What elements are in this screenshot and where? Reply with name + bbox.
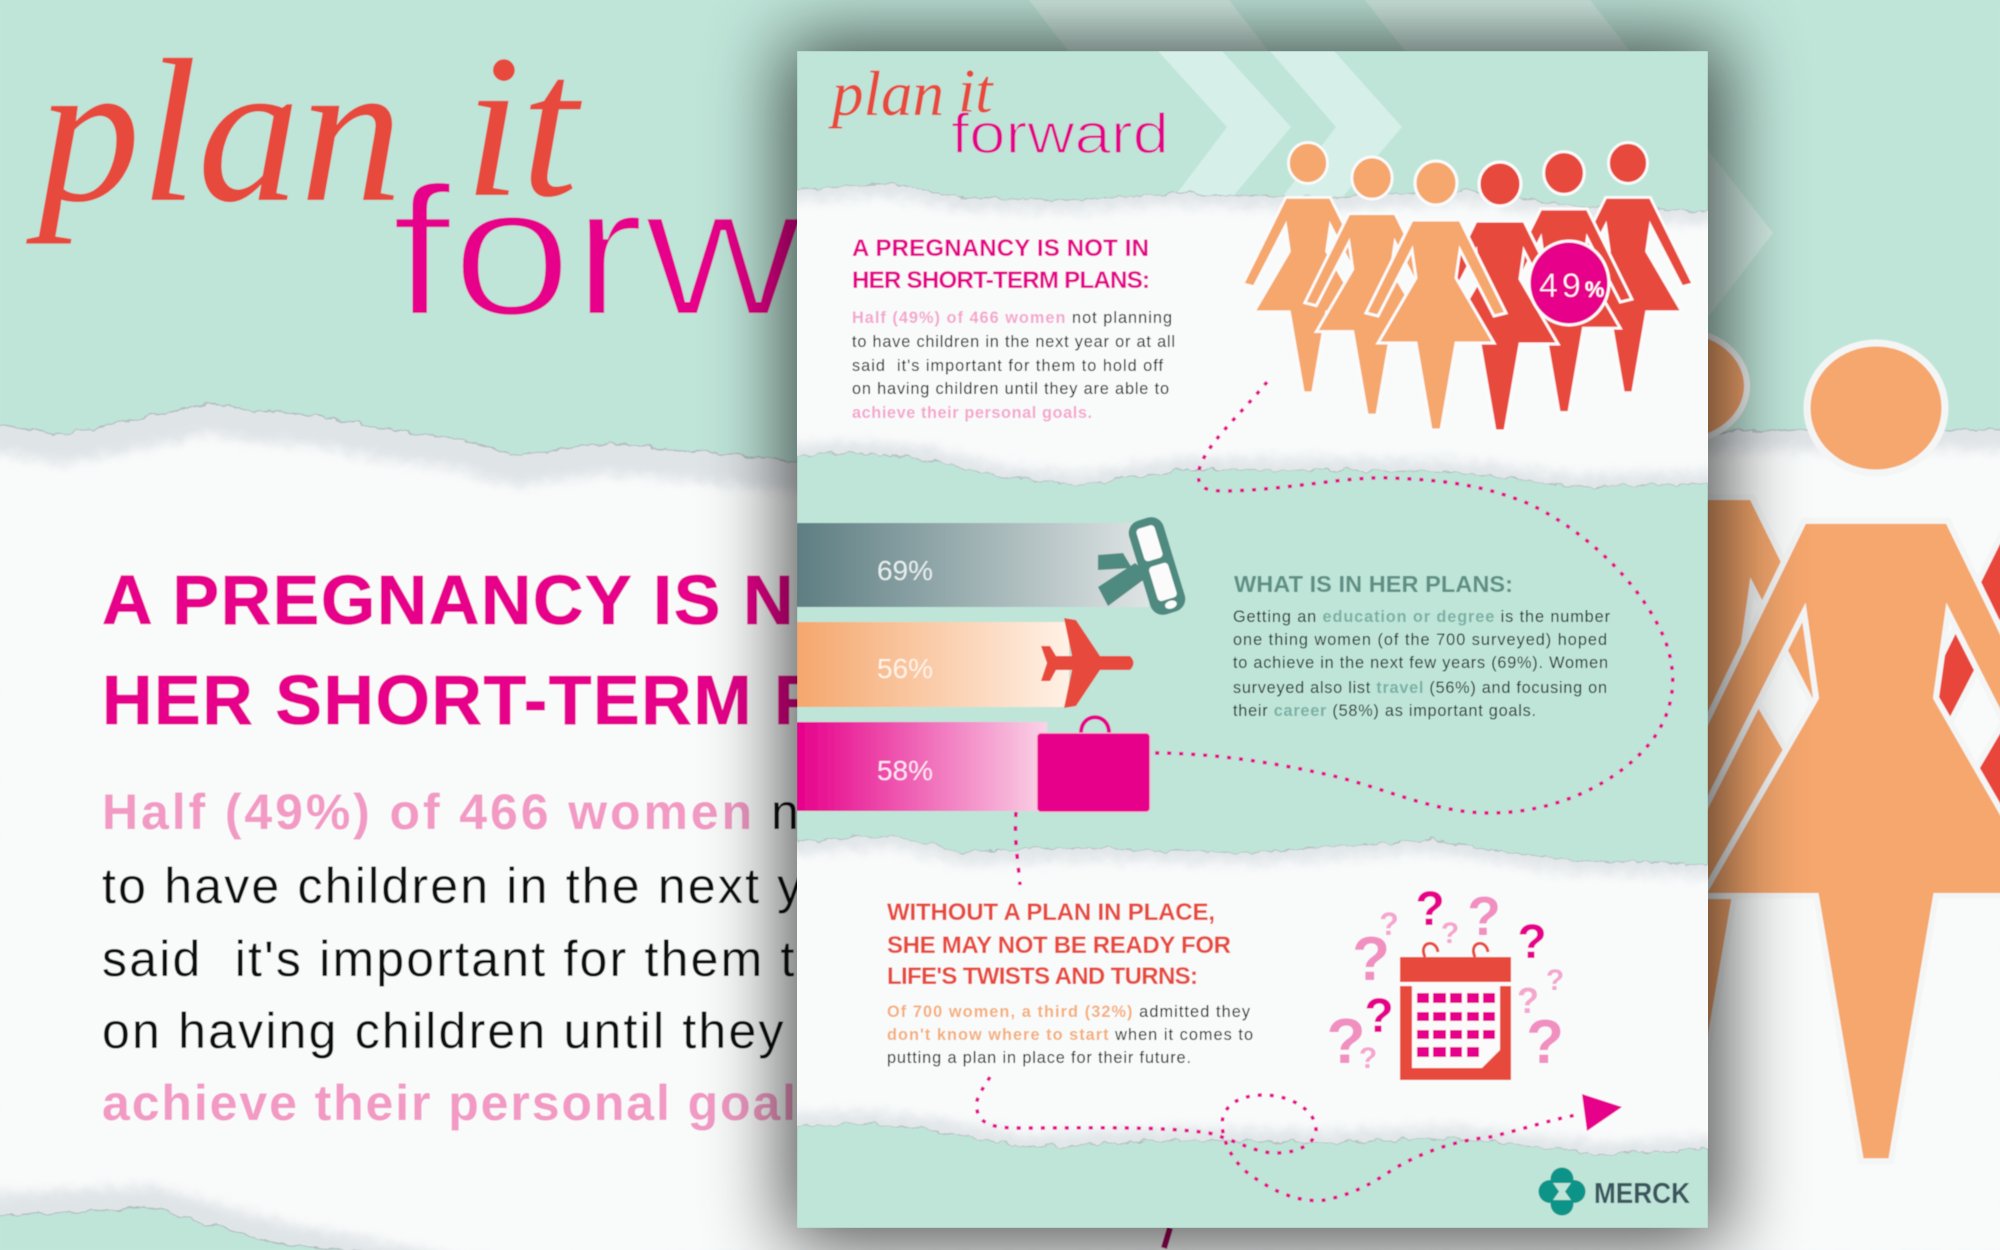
icon: question marks: ? [1546, 964, 1564, 997]
background figure: large orange woman [1666, 343, 2000, 1161]
icon: question marks: ? [1517, 980, 1539, 1021]
body: what is in her plans: surveyed also list travel (56%) and focusing on [1233, 679, 1607, 697]
arrowhead [1582, 1094, 1622, 1131]
bar 56% [797, 622, 1069, 707]
poster title: plan it: plan [828, 59, 944, 129]
poster title: plan it [828, 70, 994, 129]
icon: diploma [1098, 514, 1189, 618]
bar 69% [797, 523, 1149, 607]
poster title: forward: forward [951, 102, 1169, 166]
heading: without a plan: WITHOUT A PLAN IN PLACE, [887, 899, 1215, 926]
body: what is in her plans [1233, 608, 1611, 720]
woman 1 [1244, 140, 1350, 392]
icon: question marks: ? [1379, 906, 1399, 942]
background figure: orange woman behind poster [1470, 330, 1890, 1127]
poster title: plan it: it [958, 58, 994, 126]
dotted path: suitcase to section 3 [1015, 812, 1020, 885]
bar 58%: 58% [877, 755, 933, 786]
woman 6 [1587, 140, 1692, 392]
icon: suitcase [1037, 717, 1150, 812]
icon: question marks: ? [1364, 990, 1394, 1043]
icon: question marks: ? [1415, 883, 1445, 936]
bar 56%: 56% [877, 653, 933, 684]
heading: pregnancy: HER SHORT-TERM PLANS: [852, 267, 1150, 294]
background torn white paper strip [0, 403, 2000, 1250]
background body text: achieve their personal goals. [102, 1075, 843, 1131]
Merck logo [1538, 1168, 1690, 1216]
poster drop shadow [785, 40, 1725, 1245]
woman 5 [1522, 150, 1635, 412]
heading: without a plan [887, 899, 1231, 990]
dotted path with loop to arrow [976, 1077, 1576, 1201]
background body text: said it's important for them to hold off [102, 931, 1023, 987]
heading: what is in her plans: WHAT IS IN HER PLANS: [1234, 571, 1513, 597]
body: without a plan: putting a plan in place for their future. [887, 1049, 1191, 1067]
woman 4 [1457, 160, 1562, 430]
icon: question marks: ? [1326, 1005, 1366, 1077]
background title: plan it: plan [25, 18, 402, 245]
body: what is in her plans: their career (58%) as important goals. [1233, 702, 1536, 720]
body: what is in her plans: Getting an education or degree is the number [1233, 608, 1611, 626]
poster torn strip 2 [780, 835, 1720, 1155]
icon: calendar [1400, 943, 1511, 1080]
logo mark [1538, 1168, 1586, 1216]
poster chevrons [1158, 51, 1402, 200]
icon: question marks: ? [1441, 917, 1459, 950]
background path fragment [1164, 1228, 1170, 1248]
bar 58% [797, 722, 1047, 811]
body: pregnancy: to have children in the next year or at all [852, 333, 1175, 351]
bar 69%: 69% [877, 555, 933, 586]
background heading: HER SHORT-TERM PLANS: [102, 661, 1044, 739]
background title: plan it: it [464, 13, 583, 240]
background title: plan it [25, 13, 583, 245]
body: without a plan: Of 700 women, a third (32%) admitted they [887, 1003, 1251, 1021]
icon: question marks: ? [1517, 916, 1547, 969]
woman 3 [1366, 161, 1506, 430]
background figure: red woman far right [1875, 511, 2000, 1141]
body: pregnancy [852, 309, 1175, 422]
49% badge: 49% [1539, 267, 1604, 305]
background body text: on having children until they are able to [102, 1003, 1062, 1059]
background title: forward: forward [391, 149, 1116, 355]
poster panel [780, 51, 1720, 1228]
body: pregnancy: Half (49%) of 466 women not planning [852, 309, 1172, 327]
background heading [102, 561, 1044, 739]
dotted path: top to suitcase [1154, 382, 1673, 813]
woman 2 [1302, 155, 1415, 414]
background heading: A PREGNANCY IS NOT IN [102, 561, 989, 639]
body: pregnancy: said it's important for them to hold off [852, 357, 1163, 375]
body: pregnancy: achieve their personal goals. [852, 404, 1092, 422]
background body text: to have children in the next year or at all [102, 858, 1083, 914]
background chevrons [1029, 0, 1773, 470]
icon: question marks: ? [1352, 925, 1390, 994]
body: pregnancy: on having children until they are able to [852, 380, 1169, 398]
49% badge [1529, 241, 1609, 325]
body: without a plan: don't know where to start when it comes to [887, 1026, 1253, 1044]
heading: pregnancy [852, 238, 1148, 289]
logo wordmark: MERCK [1594, 1178, 1690, 1210]
body: without a plan [887, 1003, 1253, 1067]
background body text [102, 784, 1083, 1131]
icon: question marks: ? [1526, 1008, 1564, 1077]
icon: question marks [1326, 883, 1564, 1077]
icon: airplane [1041, 618, 1134, 708]
icon: question marks: ? [1359, 1042, 1377, 1075]
background body text: Half (49%) of 466 women not planning [102, 784, 1070, 840]
body: what is in her plans: one thing women (of the 700 surveyed) hoped [1233, 631, 1607, 649]
heading: without a plan: SHE MAY NOT BE READY FOR [887, 932, 1231, 959]
body: what is in her plans: to achieve in the next few years (69%). Women [1233, 654, 1608, 672]
calendar date squares [1417, 993, 1495, 1057]
icon: question marks: ? [1467, 885, 1501, 947]
group of six women [1243, 143, 1693, 431]
poster torn strip 1 [780, 184, 1720, 487]
heading: pregnancy: A PREGNANCY IS NOT IN [852, 235, 1149, 262]
heading: without a plan: LIFE'S TWISTS AND TURNS: [887, 963, 1198, 990]
